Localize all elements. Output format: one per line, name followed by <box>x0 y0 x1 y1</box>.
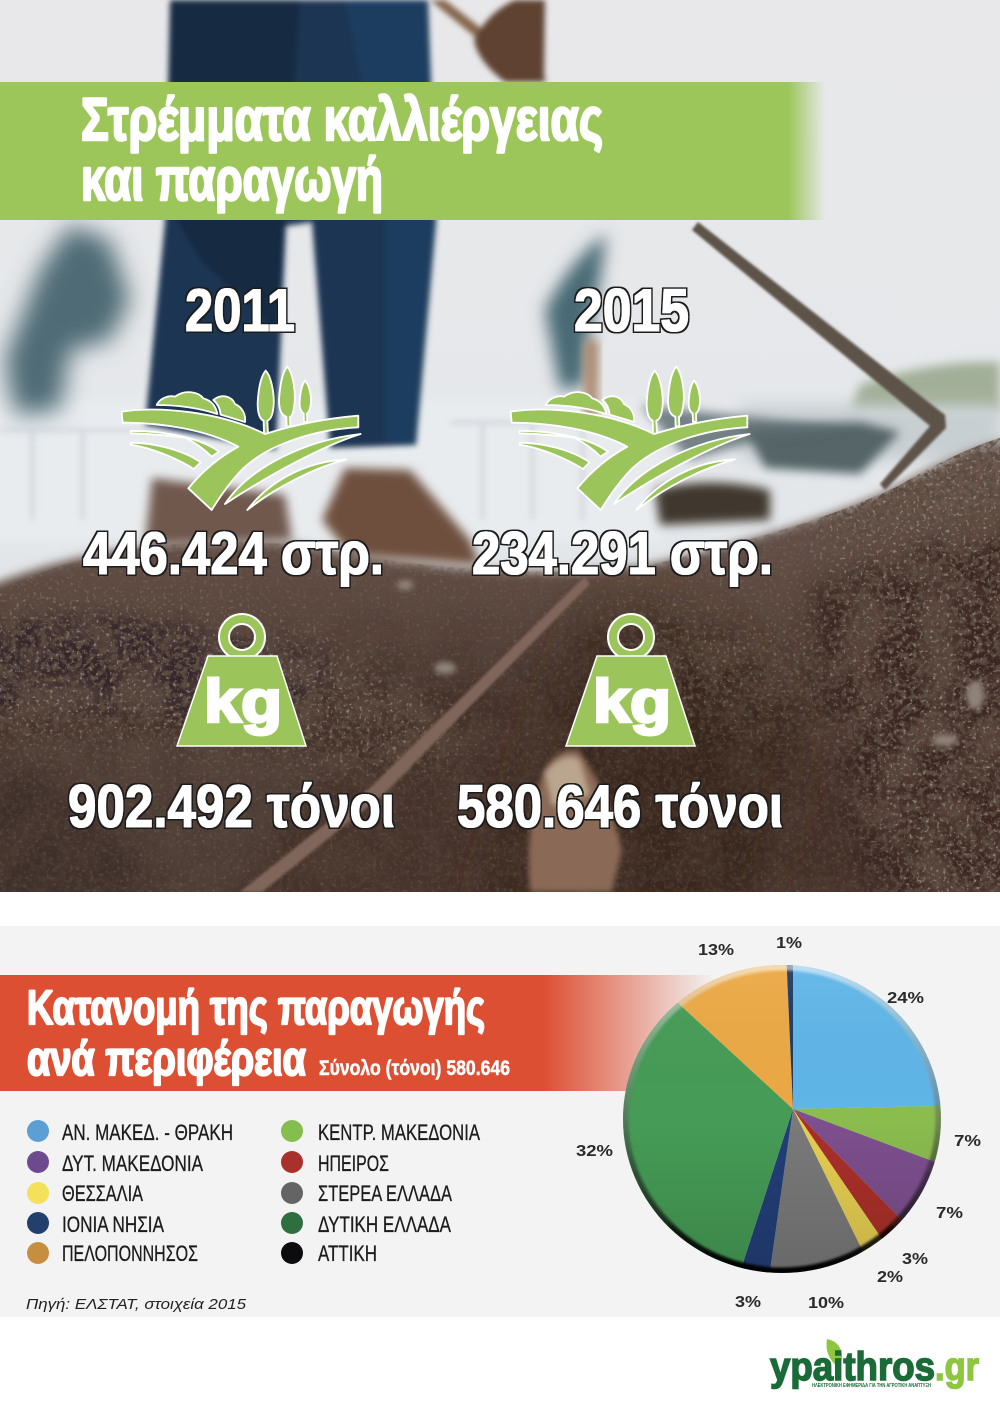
icon: kg weight 2015 <box>566 619 695 746</box>
title line 2: και παραγωγή <box>81 146 383 213</box>
icon: farm fields 2011 <box>122 367 361 510</box>
production value 2015: 580.646 τόνοι <box>457 773 783 840</box>
legend item: Δυτ. Μακεδονία: ΔΥΤ. ΜΑΚΕΔΟΝΙΑ <box>62 1151 203 1176</box>
icon: kg weight 2015: kg <box>593 668 671 735</box>
red heading banner <box>0 975 715 1091</box>
legend item: Ιόνια Νησιά <box>27 1212 164 1237</box>
legend item: Κεντρ. Μακεδονία <box>281 1120 480 1145</box>
logo: ypaithros.gr: ypaithros <box>770 1345 935 1389</box>
slice: Κεντρ. Μακεδονία 7% <box>793 1106 941 1162</box>
legend item: Πελοπόννησος: ΠΕΛΟΠΟΝΝΗΣΟΣ <box>62 1241 198 1266</box>
legend item: Δυτ. Μακεδονία <box>27 1151 203 1176</box>
total subtitle: Σύνολο (τόνοι) 580.646 <box>319 1057 510 1080</box>
logo: ypaithros.gr: ΗΛΕΚΤΡΟΝΙΚΗ ΕΦΗΜΕΡΙΔΑ ΓΙΑ ΤΗΝ ΑΓΡΟΤΙΚΗ ΑΝΑΠΤΥΞΗ <box>812 1383 931 1389</box>
legend item: Θεσσαλία <box>27 1181 143 1206</box>
legend item: Θεσσαλία: ΘΕΣΣΑΛΙΑ <box>62 1181 143 1206</box>
legend item: Ιόνια Νησιά: ΙΟΝΙΑ ΝΗΣΙΑ <box>62 1212 164 1237</box>
pie label 32%: 32% <box>576 1143 613 1160</box>
pie label 10%: 10% <box>808 1295 844 1312</box>
slice: Ήπειρος 3% <box>793 1109 902 1239</box>
slice: Αττική 1% <box>787 950 793 1109</box>
legend item: Πελοπόννησος <box>27 1241 198 1266</box>
icon: kg weight 2011 <box>177 619 306 746</box>
heading line 1: Κατανομή της παραγωγής <box>27 982 485 1035</box>
year 2015: 2015 <box>574 277 689 344</box>
legend item: Ήπειρος <box>281 1151 389 1176</box>
slice: Αν. Μακεδ. - Θράκη 24% <box>793 965 940 1109</box>
area value 2011: 446.424 στρ. <box>83 520 384 587</box>
source note: Πηγή: ΕΛΣΤΑΤ, στοιχεία 2015 <box>26 1296 247 1313</box>
pie label 2%: 2% <box>877 1269 903 1286</box>
legend item: Κεντρ. Μακεδονία: ΚΕΝΤΡ. ΜΑΚΕΔΟΝΙΑ <box>318 1120 480 1145</box>
pie label 1%: 1% <box>776 935 802 952</box>
pie chart <box>623 965 941 1273</box>
pie label 24%: 24% <box>887 990 924 1007</box>
title line 1: Στρέμματα καλλιέργειας <box>81 86 603 153</box>
legend <box>27 1120 480 1266</box>
logo: ypaithros.gr: .gr <box>935 1345 979 1389</box>
pie label 7%: 7% <box>936 1205 963 1222</box>
panel: distribution background <box>0 926 1000 1317</box>
green title banner <box>0 82 825 220</box>
slice: Ιόνια Νησιά 3% <box>742 1110 793 1272</box>
production value 2011: 902.492 τόνοι <box>68 773 395 840</box>
slice: Πελοπόννησος 13% <box>678 965 793 1109</box>
heading line 2: ανά περιφέρεια <box>27 1033 306 1086</box>
icon: leaf <box>826 1339 842 1367</box>
pie label 3%: 3% <box>735 1294 761 1311</box>
icon: farm fields 2015 <box>511 367 750 510</box>
legend item: Αττική <box>281 1241 377 1266</box>
legend item: Στερεά Ελλάδα <box>281 1181 452 1206</box>
background photo: farmer hoeing soil <box>0 0 1000 910</box>
legend item: Αν. Μακεδ. - Θράκη <box>27 1120 233 1145</box>
pie label 13%: 13% <box>698 942 734 959</box>
slice: Δυτική Ελλάδα 32% <box>623 1002 793 1268</box>
slice: Θεσσαλία 2% <box>794 1110 882 1252</box>
icon: kg weight 2011: kg <box>204 668 282 735</box>
pie label 3%: 3% <box>902 1251 928 1268</box>
slice: Δυτ. Μακεδονία 7% <box>793 1109 935 1220</box>
legend item: Αττική: ΑΤΤΙΚΗ <box>318 1241 377 1266</box>
slice: Στερεά Ελλάδα 10% <box>770 1109 863 1273</box>
legend item: Δυτική Ελλάδα <box>281 1212 451 1237</box>
area value 2015: 234.291 στρ. <box>472 520 773 587</box>
year 2011: 2011 <box>185 277 295 344</box>
legend item: Δυτική Ελλάδα: ΔΥΤΙΚΗ ΕΛΛΑΔΑ <box>318 1212 451 1237</box>
pie label 7%: 7% <box>954 1133 981 1150</box>
legend item: Ήπειρος: ΗΠΕΙΡΟΣ <box>318 1151 389 1176</box>
legend item: Αν. Μακεδ. - Θράκη: ΑΝ. ΜΑΚΕΔ. - ΘΡΑΚΗ <box>62 1120 233 1145</box>
legend item: Στερεά Ελλάδα: ΣΤΕΡΕΑ ΕΛΛΑΔΑ <box>318 1181 452 1206</box>
